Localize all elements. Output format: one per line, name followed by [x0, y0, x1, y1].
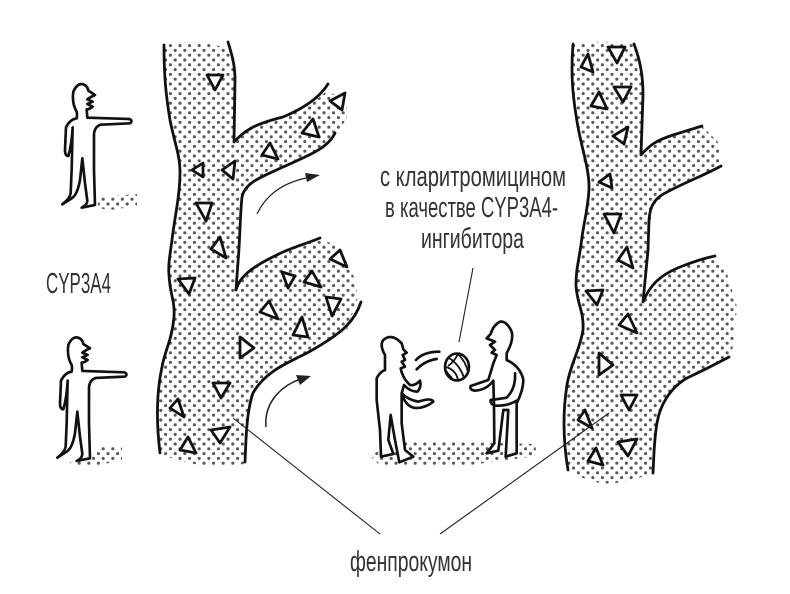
- arrow: upper branch flow: [257, 173, 320, 214]
- trunk lower edge: [653, 357, 729, 473]
- panel: right vessel: [564, 42, 737, 483]
- upper branch outline: [634, 44, 702, 155]
- drug triangles: right vessel: [578, 47, 637, 465]
- text: with clarithromycin as CYP3A4 inhibitor: с кларитромицином: [380, 161, 566, 193]
- upper branch outline: [228, 42, 328, 142]
- ground shadow: top figure: [98, 194, 137, 210]
- drug triangles: left vessel: [170, 75, 347, 453]
- text: with clarithromycin as CYP3A4 inhibitor: в качестве CYP3A4-: [385, 192, 558, 224]
- lower branch outline: [236, 133, 335, 290]
- leader line: phenprocoumon to right vessel: [440, 413, 609, 534]
- right vessel outline: [564, 44, 589, 470]
- label: phenprocoumon: фенпрокумон: [350, 546, 472, 578]
- figure: top CYP3A4 person pointing: [62, 84, 132, 208]
- left vessel outline: [158, 45, 180, 453]
- figure: person throwing the ball: [377, 337, 433, 462]
- leader line: phenprocoumon to left vessel: [233, 418, 380, 534]
- trunk lower edge: [245, 302, 361, 462]
- ground shadow: centre figures: [368, 441, 537, 466]
- text: with clarithromycin as CYP3A4 inhibitor: ингибитора: [421, 223, 525, 255]
- left vessel dotted fill: [157, 42, 358, 466]
- catching arm: [491, 373, 517, 406]
- panel: left vessel: [157, 42, 361, 466]
- label: CYP3A4: CYP3A4: [46, 268, 111, 300]
- ground shadow: bottom figure: [70, 446, 122, 466]
- figure: bottom CYP3A4 person pointing: [57, 337, 127, 461]
- leader line: text to ball: [459, 268, 473, 342]
- arrow: lower branch flow: [266, 375, 311, 427]
- lower branch outline: [643, 166, 721, 302]
- figure: person catching the ball: [470, 322, 523, 457]
- right vessel dotted fill: [564, 42, 737, 483]
- icon: ball: [445, 354, 469, 380]
- motion lines of the throw: [416, 352, 439, 369]
- text: with clarithromycin as CYP3A4 inhibitor: [380, 161, 566, 255]
